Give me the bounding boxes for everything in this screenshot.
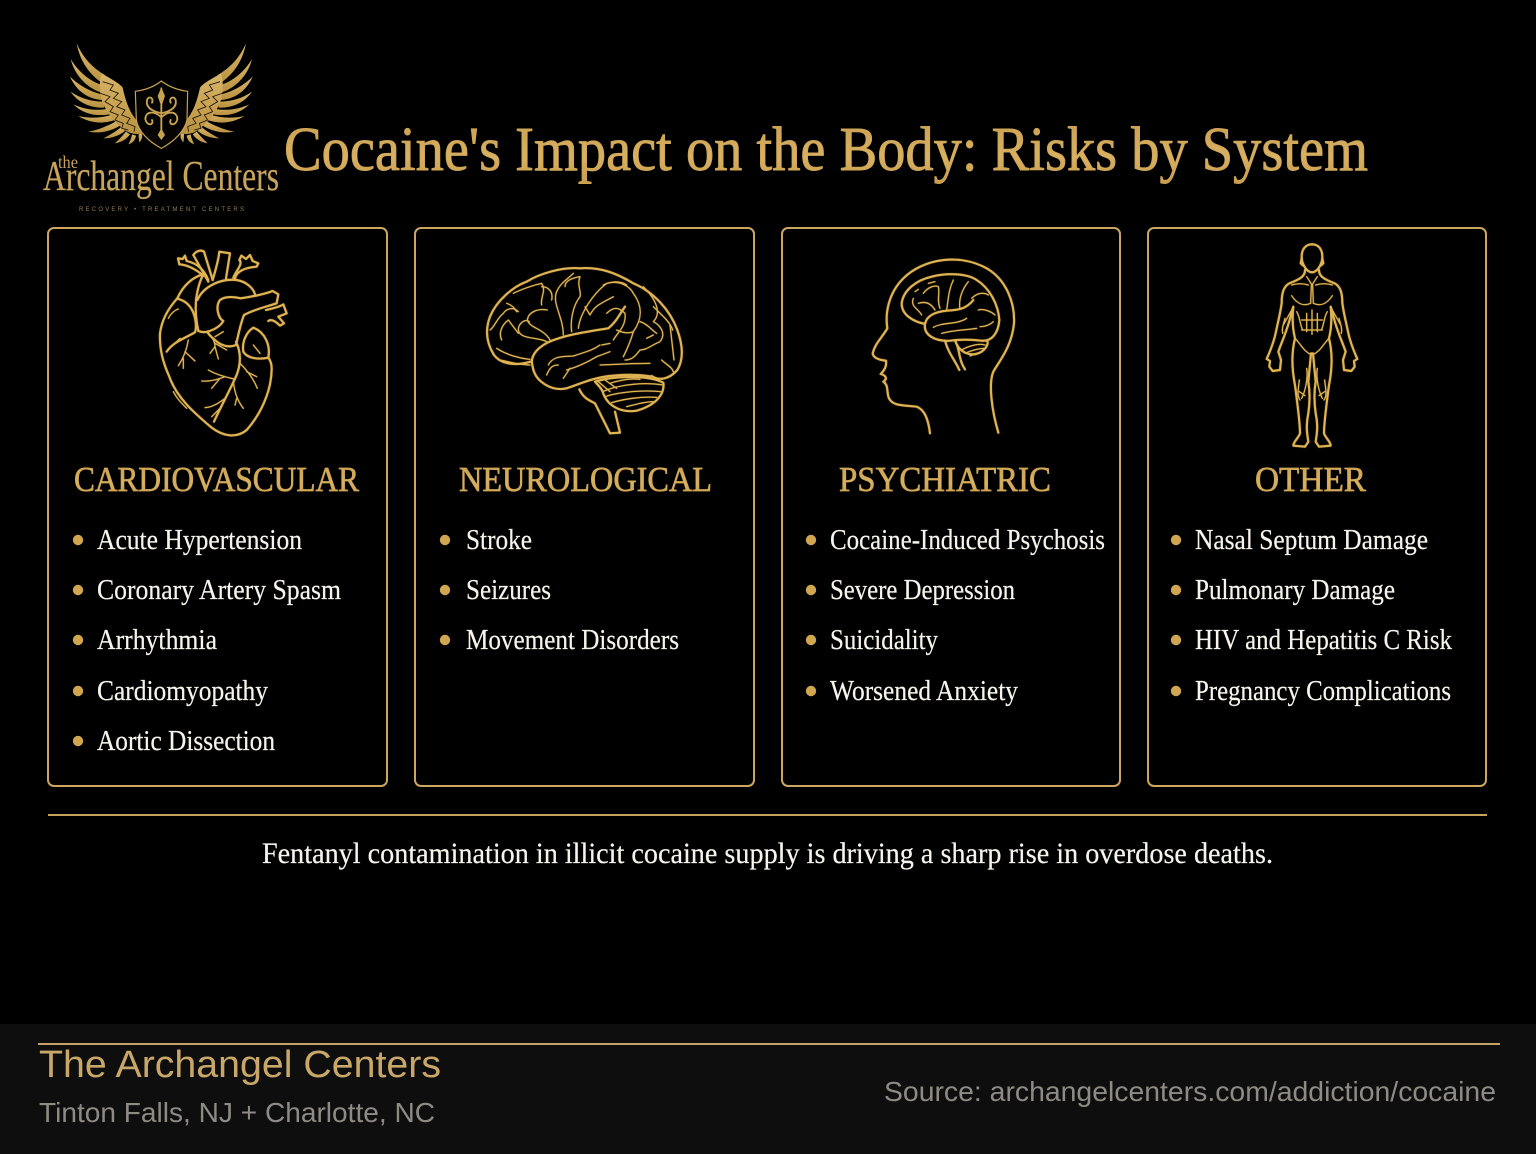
footer locations: Tinton Falls, NJ + Charlotte, NC: [39, 1097, 435, 1128]
logo wordmark: Archangel Centers: [43, 154, 279, 200]
icon: heart: [160, 251, 287, 435]
risk list: HIV and Hepatitis C Risk: [1195, 624, 1452, 656]
panel: cardiovascular: [48, 228, 387, 786]
risk list: Acute Hypertension: [97, 524, 302, 556]
risk list: Severe Depression: [830, 574, 1015, 606]
panel: neurological: [415, 228, 754, 786]
icon: brain: [487, 268, 682, 433]
logo wordmark: the: [58, 152, 78, 172]
risk list: Movement Disorders: [466, 624, 679, 656]
icon: human body: [1267, 244, 1357, 447]
risk list: Cardiomyopathy: [97, 675, 268, 707]
icon: head with brain: [873, 260, 1014, 433]
callout: fentanyl warning: Fentanyl contamination in illicit cocaine supply is driving a sharp rise in overdose deaths.: [262, 838, 1273, 870]
shield: [135, 81, 188, 148]
risk list: [73, 524, 341, 757]
risk list: Nasal Septum Damage: [1195, 524, 1428, 556]
title: Cocaine's Impact on the Body: Risks by System: [284, 116, 1368, 184]
risk list: Pulmonary Damage: [1195, 574, 1395, 606]
risk list: [440, 524, 679, 656]
risk list: Arrhythmia: [97, 624, 217, 656]
logo: The Archangel Centers: [43, 43, 279, 213]
risk list: Stroke: [466, 524, 532, 556]
risk list: Worsened Anxiety: [830, 675, 1018, 707]
risk list: [806, 524, 1105, 707]
risk list: Suicidality: [830, 624, 938, 656]
risk list: Cocaine-Induced Psychosis: [830, 524, 1105, 556]
risk list: Pregnancy Complications: [1195, 675, 1451, 707]
risk list: [1171, 524, 1452, 707]
footer source: Source: archangelcenters.com/addiction/cocaine: [884, 1076, 1496, 1107]
heading: PSYCHIATRIC: [839, 460, 1051, 499]
logo wordmark: [43, 152, 279, 213]
heading: CARDIOVASCULAR: [74, 460, 360, 499]
footer: [0, 1024, 1536, 1154]
risk list: Coronary Artery Spasm: [97, 574, 341, 606]
heading: NEUROLOGICAL: [459, 460, 712, 499]
footer organisation name: The Archangel Centers: [39, 1044, 441, 1086]
logo emblem: wings and shield: [70, 43, 253, 148]
panel: other: [1148, 228, 1486, 786]
risk list: Aortic Dissection: [97, 725, 275, 757]
heading: OTHER: [1255, 460, 1367, 499]
risk list: Seizures: [466, 574, 551, 606]
panel: psychiatric: [782, 228, 1120, 786]
logo wordmark: RECOVERY • TREATMENT CENTERS: [79, 207, 244, 213]
